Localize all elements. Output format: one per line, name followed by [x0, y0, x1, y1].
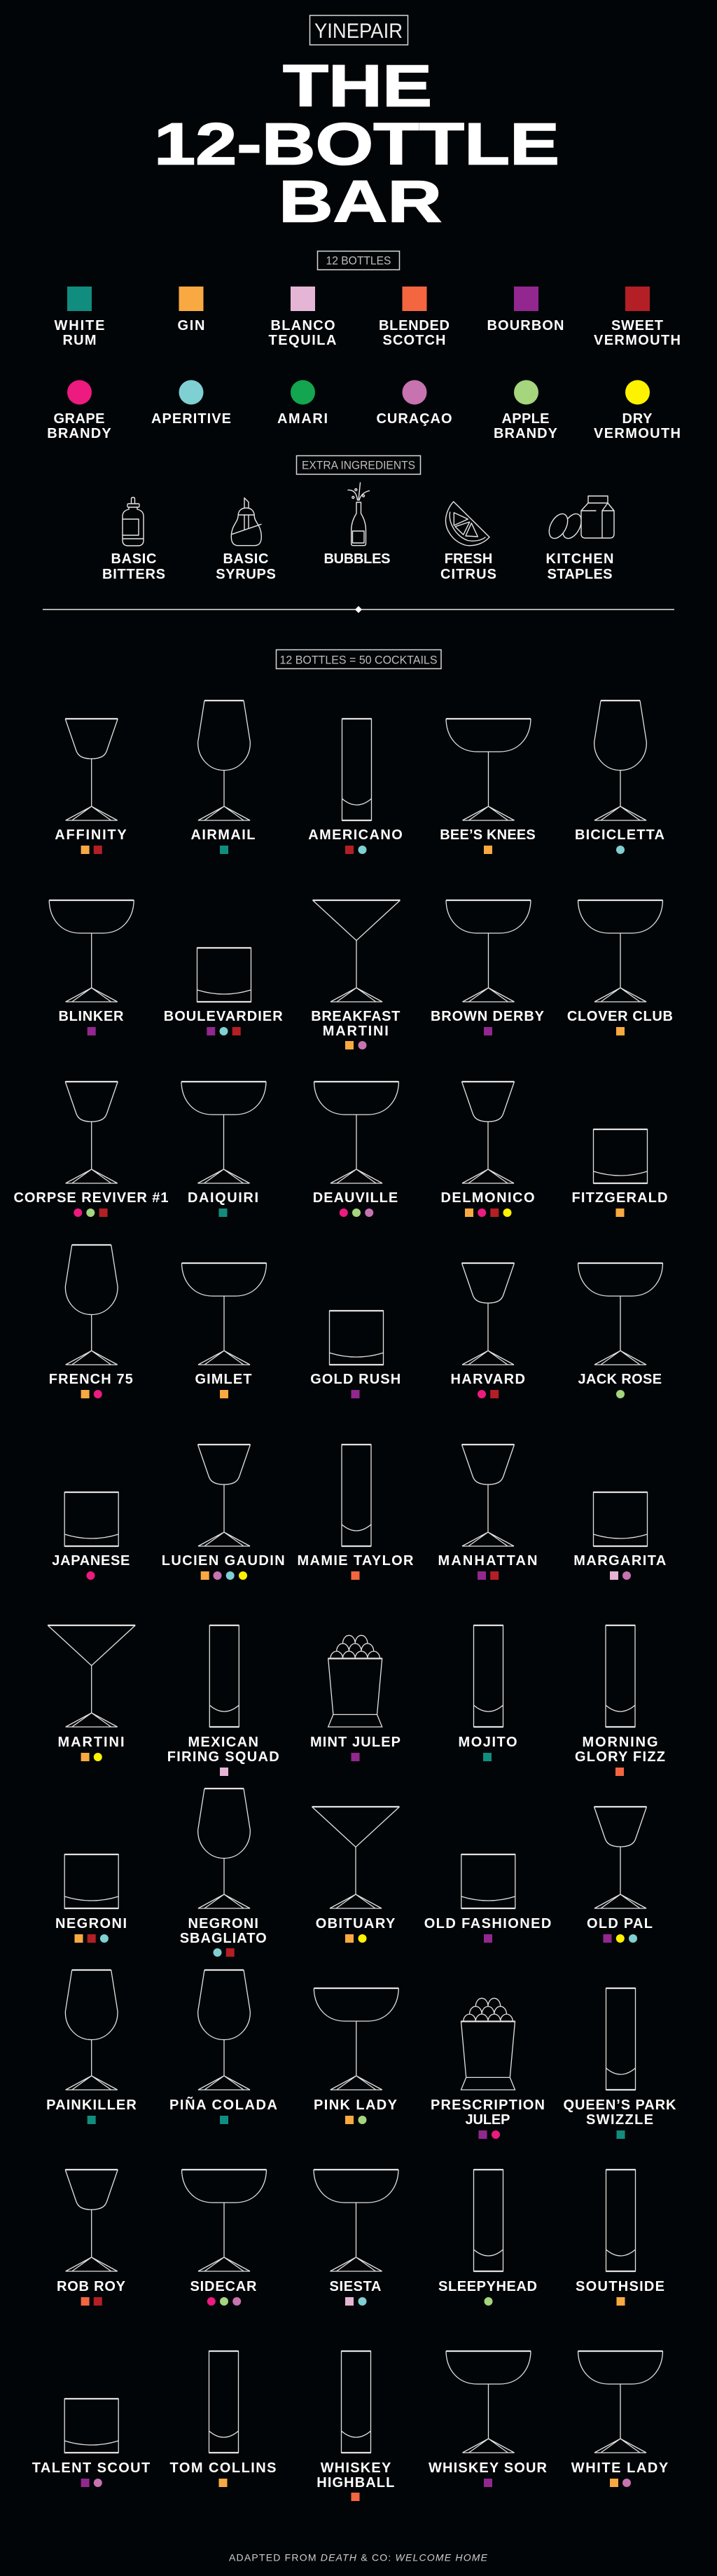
icon: first egg [545, 511, 571, 542]
name: CORPSE REVIVER #1 [14, 1190, 168, 1206]
name: BLINKER [59, 1009, 124, 1024]
glass [314, 1082, 399, 1183]
bottle: apple brandy [494, 380, 558, 441]
glass [446, 719, 531, 820]
ingredients [616, 846, 625, 854]
glass [461, 1854, 515, 1908]
cocktail: Rob Roy [57, 2170, 126, 2306]
ingredients [610, 1571, 631, 1580]
glass [578, 1263, 662, 1365]
cocktail: Old Fashioned [424, 1854, 551, 1943]
heading: 12 bottles: 12 BOTTLES [326, 254, 391, 268]
glass [49, 900, 134, 1002]
cocktail: Whiskey Highball [316, 2351, 394, 2501]
ingredients [484, 1027, 492, 1035]
ingredients [81, 1753, 102, 1761]
glass [461, 1998, 515, 2090]
ingredients [351, 1753, 360, 1761]
glass [64, 1854, 118, 1908]
cocktail: Tom Collins [169, 2351, 276, 2487]
glass [462, 1445, 514, 1546]
name: HIGHBALL [316, 2475, 394, 2491]
glass [594, 1807, 647, 1908]
cocktail: Mexican Firing Squad [167, 1625, 279, 1776]
glass [198, 1789, 250, 1908]
name: SIESTA [329, 2279, 381, 2294]
cocktail: Queen's Park Swizzle [563, 1988, 676, 2139]
icon: bitters bottle [123, 497, 144, 546]
bottle: blanco tequila: TEQUILA [269, 333, 336, 348]
name: SLEEPYHEAD [438, 2279, 537, 2294]
cocktail: Breakfast Martini [311, 900, 401, 1049]
title [154, 53, 559, 234]
name: BEE’S KNEES [440, 827, 536, 843]
name: MORNING [583, 1735, 658, 1750]
name: GIMLET [195, 1372, 252, 1387]
ingredients [218, 1208, 227, 1217]
name: LUCIEN GAUDIN [162, 1553, 285, 1569]
bottle: aperitive [151, 380, 231, 427]
item: bubbles: BUBBLES [323, 551, 391, 567]
name [180, 1916, 267, 1946]
ingredients [218, 2479, 227, 2487]
item: fresh citrus: FRESH [445, 551, 492, 567]
cocktail: Whiskey Sour [429, 2351, 548, 2487]
ingredients [616, 2297, 625, 2306]
item: bubbles [323, 483, 391, 567]
bottle: blended scotch: BLENDED [379, 318, 450, 333]
icon: syrup dispenser [231, 498, 261, 546]
bottle: grape brandy [47, 380, 111, 441]
cocktail: Martini [48, 1625, 135, 1761]
name: BICICLETTA [575, 827, 664, 843]
name: BOULEVARDIER [164, 1009, 283, 1024]
ingredients [616, 2130, 625, 2139]
glass [606, 1625, 635, 1727]
icon: bubbles [352, 489, 364, 499]
item: fresh citrus: CITRUS [440, 567, 496, 582]
ingredients [74, 1208, 108, 1217]
panel: 12 bottles legend [47, 287, 681, 441]
name: SOUTHSIDE [576, 2279, 664, 2294]
cocktail: Negroni [55, 1854, 127, 1943]
ingredients [616, 1027, 625, 1035]
cocktail: Sidecar [182, 2170, 266, 2306]
name: SBAGLIATO [180, 1931, 267, 1946]
ingredients [615, 1768, 624, 1776]
bottle: dry vermouth: DRY [622, 411, 653, 427]
bottle: bourbon [487, 287, 564, 333]
bottle: apple brandy: APPLE [501, 411, 549, 427]
glass [594, 1129, 647, 1183]
ingredients [345, 1041, 367, 1049]
title: 12-BOTTLE [154, 111, 559, 177]
name [167, 1735, 279, 1765]
ingredients [220, 1390, 228, 1398]
name: PRESCRIPTION [431, 2098, 545, 2113]
name: MEXICAN [188, 1735, 258, 1750]
item: basic bitters: BASIC [111, 551, 157, 567]
heading: 12 bottles = 50 cocktails [276, 650, 441, 668]
ingredients [483, 1753, 492, 1761]
name: TOM COLLINS [169, 2460, 276, 2476]
name: NEGRONI [188, 1916, 258, 1931]
cocktail: White Lady [571, 2351, 669, 2487]
name: MOJITO [458, 1735, 517, 1750]
cocktail: Lucien Gaudin [162, 1445, 285, 1580]
name: ROB ROY [57, 2279, 126, 2294]
cocktail: Bicicletta [575, 701, 664, 854]
item: basic bitters [102, 497, 165, 582]
ingredients [479, 2130, 500, 2139]
cocktail: Americano [308, 719, 403, 854]
glass [328, 1635, 382, 1727]
glass [314, 1988, 398, 2090]
glass [446, 900, 531, 1002]
glass [209, 1625, 239, 1727]
glass [182, 1263, 266, 1365]
ingredients [207, 1027, 241, 1035]
cocktail: Sleepyhead [438, 2170, 537, 2306]
name: HARVARD [450, 1372, 525, 1387]
bottle: grape brandy: GRAPE [53, 411, 105, 427]
cocktail: Bee's Knees [440, 719, 536, 854]
cocktail: Delmonico [441, 1082, 535, 1217]
ingredients [345, 1934, 367, 1943]
cocktail: Gold Rush [310, 1311, 401, 1398]
ingredients [201, 1571, 247, 1580]
item: basic syrups: SYRUPS [216, 567, 276, 582]
name: PINK LADY [314, 2098, 398, 2113]
item: kitchen staples: KITCHEN [546, 551, 613, 567]
glass [312, 1807, 399, 1908]
name: AMERICANO [308, 827, 403, 843]
icon: citrus wedge [445, 502, 489, 546]
bottle: blended scotch: SCOTCH [382, 333, 445, 348]
glass [65, 719, 118, 820]
glass [198, 1970, 250, 2090]
bottle: grape brandy: BRANDY [47, 426, 111, 441]
glass [65, 1082, 118, 1183]
name: FRENCH 75 [49, 1372, 133, 1387]
name: JULEP [465, 2112, 510, 2128]
name: WHISKEY [321, 2460, 391, 2476]
ingredients [351, 1571, 360, 1580]
cocktail: Obituary [312, 1807, 399, 1943]
ingredients [81, 846, 102, 854]
name: TALENT SCOUT [32, 2460, 150, 2476]
name: WHISKEY SOUR [429, 2460, 548, 2476]
name: GLORY FIZZ [575, 1749, 665, 1765]
glass [182, 2170, 266, 2271]
name: SWIZZLE [586, 2112, 653, 2128]
name: MARGARITA [573, 1553, 666, 1569]
cocktail: Siesta [314, 2170, 398, 2306]
cocktail: Negroni Sbagliato [180, 1789, 267, 1957]
ingredients [74, 1934, 109, 1943]
glass [578, 2351, 662, 2453]
glass [342, 719, 371, 820]
name: DELMONICO [441, 1190, 535, 1206]
bottle: sweet vermouth: VERMOUTH [594, 333, 681, 348]
bottle: white rum: WHITE [55, 318, 105, 333]
bottle: amari: AMARI [277, 411, 328, 427]
cocktail: Brown Derby [431, 900, 545, 1035]
glass [197, 948, 251, 1002]
cocktail: Southside [576, 2170, 664, 2306]
icon: carton [581, 496, 614, 538]
ingredients [478, 1390, 499, 1398]
glass [65, 1245, 118, 1365]
bottle: gin [178, 287, 204, 333]
name: AIRMAIL [190, 827, 255, 843]
name: OLD FASHIONED [424, 1916, 551, 1931]
cocktail: Pina Colada [169, 1970, 277, 2124]
name: FIRING SQUAD [167, 1749, 279, 1765]
glass [473, 2170, 503, 2271]
cocktail: Mojito [458, 1625, 517, 1761]
glass [197, 1445, 251, 1546]
cocktail: Painkiller [46, 1970, 137, 2124]
glass [209, 2351, 238, 2453]
bottle: bourbon: BOURBON [487, 318, 564, 333]
ingredients [351, 1390, 360, 1398]
bottle: curacao [377, 380, 452, 427]
ingredients [220, 2116, 228, 2124]
ingredients [484, 2479, 492, 2487]
name: MARTINI [57, 1735, 125, 1750]
divider with diamond [43, 606, 674, 613]
name: AFFINITY [55, 827, 127, 843]
name: JACK ROSE [578, 1372, 662, 1387]
name: DEAUVILLE [313, 1190, 398, 1206]
ingredients [81, 2297, 102, 2306]
glass [446, 2351, 531, 2453]
ingredients [616, 1390, 625, 1398]
glass [329, 1311, 384, 1365]
name: BREAKFAST [311, 1009, 400, 1024]
cocktail: Old Pal [587, 1807, 653, 1943]
glass [314, 2170, 398, 2271]
cocktail: Morning Glory Fizz [575, 1625, 665, 1776]
ingredients [81, 2479, 102, 2487]
cocktail: Fitzgerald [571, 1129, 668, 1217]
name: MARTINI [323, 1024, 389, 1039]
bottle: amari [277, 380, 328, 427]
ingredients [345, 846, 367, 854]
bottle: blanco tequila [269, 287, 336, 348]
ingredients [88, 1027, 96, 1035]
title: BAR [279, 168, 442, 234]
bottle: gin: GIN [178, 318, 204, 333]
glass [312, 900, 401, 1002]
bottle: dry vermouth: VERMOUTH [594, 426, 681, 441]
item: basic bitters: BITTERS [102, 567, 165, 582]
glass [181, 1082, 266, 1183]
cocktail: Affinity [55, 719, 127, 854]
ingredients [351, 2493, 360, 2501]
name: MAMIE TAYLOR [297, 1553, 414, 1569]
cocktail: French 75 [49, 1245, 133, 1398]
ingredients [604, 1934, 637, 1943]
name: GOLD RUSH [310, 1372, 401, 1387]
cocktail: Deauville [313, 1082, 399, 1217]
name: WHITE LADY [571, 2460, 669, 2476]
cocktail: Blinker [49, 900, 134, 1035]
name: OLD PAL [587, 1916, 653, 1931]
item: basic syrups: BASIC [223, 551, 269, 567]
glass [198, 701, 250, 820]
cocktail: Daiquiri [181, 1082, 266, 1217]
panel: cocktails grid [14, 701, 676, 2501]
name [563, 2098, 676, 2128]
cocktail: Jack Rose [578, 1263, 662, 1398]
ingredients [345, 2116, 367, 2124]
glass [606, 2170, 636, 2271]
panel: extra ingredients [102, 483, 614, 582]
glass [342, 2351, 371, 2453]
glass [48, 1625, 135, 1727]
bottle: sweet vermouth: SWEET [611, 318, 663, 333]
name: DAIQUIRI [188, 1190, 258, 1206]
ingredients [88, 2116, 96, 2124]
name [316, 2460, 394, 2491]
name: BROWN DERBY [431, 1009, 545, 1024]
glass [606, 1988, 636, 2090]
bottle: white rum: RUM [63, 333, 97, 348]
glass [342, 1445, 371, 1546]
glass [578, 900, 662, 1002]
name: PIÑA COLADA [169, 2097, 277, 2113]
ingredients [340, 1208, 373, 1217]
cocktail: Corpse Reviver #1 [14, 1082, 168, 1217]
name: OBITUARY [316, 1916, 396, 1931]
name [311, 1009, 400, 1039]
cocktail: Talent Scout [32, 2399, 150, 2487]
ingredients [213, 1948, 235, 1957]
ingredients [345, 2297, 367, 2306]
cocktail: Harvard [450, 1263, 525, 1398]
glass [462, 1082, 514, 1183]
bottle: aperitive: APERITIVE [151, 411, 231, 427]
bottle: sweet vermouth [594, 287, 681, 348]
ingredients [81, 1390, 102, 1398]
bottle: curacao: CURAÇAO [377, 411, 452, 427]
ingredients [478, 1571, 499, 1580]
cocktail: Pink Lady [314, 1988, 398, 2124]
name: PAINKILLER [46, 2098, 137, 2113]
icon: second egg [559, 511, 585, 542]
ingredients [610, 2479, 631, 2487]
name [575, 1735, 665, 1765]
cocktail: Airmail [190, 701, 255, 854]
ingredients [465, 1208, 511, 1217]
ingredients [485, 2297, 493, 2306]
ingredients [484, 846, 492, 854]
cocktail: Clover Club [567, 900, 673, 1035]
ingredients [207, 2297, 241, 2306]
item: kitchen staples: STAPLES [548, 567, 612, 582]
ingredients [220, 846, 228, 854]
footer credit: ADAPTED FROM DEATH & CO: WELCOME HOME [229, 2551, 488, 2563]
logo: VinePair: YINEPAIR [314, 20, 403, 43]
bottle: blended scotch [379, 287, 450, 348]
heading: 12 bottles = 50 cocktails: 12 BOTTLES = 50 COCKTAILS [280, 653, 437, 667]
name: MINT JULEP [310, 1735, 401, 1750]
glass [64, 2399, 118, 2453]
glass [64, 1492, 118, 1546]
glass [65, 1970, 118, 2090]
glass [594, 1492, 647, 1546]
name: CLOVER CLUB [567, 1009, 673, 1024]
item: basic syrups [216, 498, 276, 582]
cocktail: Boulevardier [164, 948, 283, 1035]
name: SIDECAR [190, 2279, 257, 2294]
name: NEGRONI [55, 1916, 127, 1931]
bottle: white rum [55, 287, 105, 348]
icon: sparkling bottle [348, 483, 370, 546]
bottle: blanco tequila: BLANCO [270, 318, 335, 333]
cocktail: Japanese [52, 1492, 130, 1580]
ingredients [616, 1208, 625, 1217]
name: MANHATTAN [438, 1553, 538, 1569]
glass [65, 2170, 118, 2271]
cocktail: Margarita [573, 1492, 666, 1580]
ingredients [87, 1571, 95, 1580]
name [431, 2098, 545, 2128]
name: FITZGERALD [571, 1190, 668, 1206]
ingredients [220, 1768, 228, 1776]
heading: 12 bottles [318, 251, 399, 270]
ingredients [484, 1934, 492, 1943]
heading: extra ingredients [297, 455, 420, 474]
cocktail: Gimlet [182, 1263, 266, 1398]
glass [462, 1263, 514, 1365]
name: JAPANESE [52, 1553, 130, 1569]
name: QUEEN’S PARK [563, 2098, 676, 2113]
title: THE [283, 53, 432, 119]
bottle: apple brandy: BRANDY [494, 426, 558, 441]
item: fresh citrus [440, 502, 496, 582]
glass [594, 701, 646, 820]
cocktail: Mamie Taylor [297, 1445, 414, 1580]
item: kitchen staples [545, 496, 614, 582]
glass [473, 1625, 503, 1727]
bottle: dry vermouth [594, 380, 681, 441]
heading: extra ingredients: EXTRA INGREDIENTS [302, 458, 415, 472]
cocktail: Mint Julep [310, 1635, 401, 1761]
cocktail: Manhattan [438, 1445, 538, 1580]
cocktail: Prescription Julep [431, 1998, 545, 2139]
